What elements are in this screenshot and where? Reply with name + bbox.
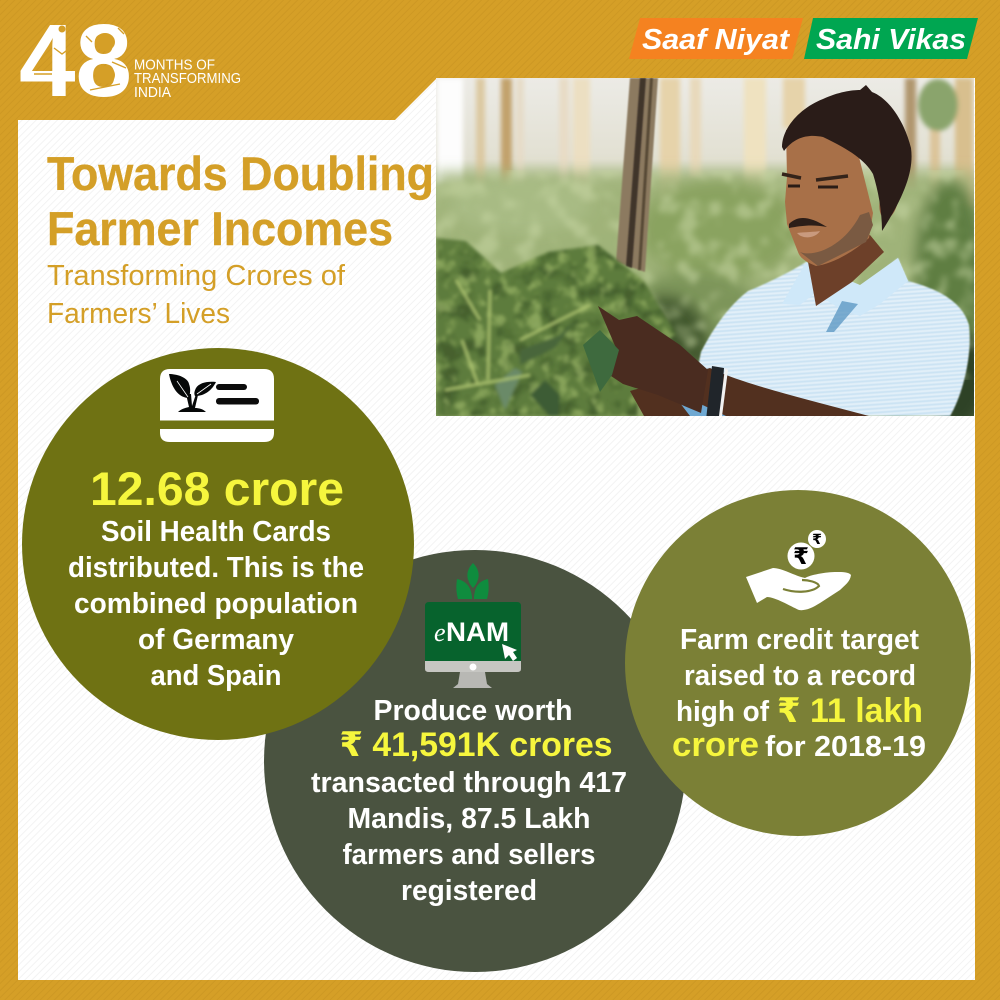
hair [782,85,912,231]
icon: numeral 48 made of pictograms: 48 [19,3,132,118]
text: eNAM statistic: Mandis, 87.5 Lakh [348,803,590,835]
text: farm credit statistic: Farm credit target [680,624,919,656]
text: farm credit statistic [672,624,926,764]
text: farm credit statistic: raised to a record [684,660,916,692]
logo text: MONTHS OF [134,58,215,74]
forearm [630,368,869,416]
badge: Saaf Niyat: Saaf Niyat [642,24,790,56]
logo text: TRANSFORMING [134,71,241,87]
icon: soil health card [160,369,274,442]
ear [879,202,897,216]
subtitle: Farmers’ Lives [47,298,230,330]
text: eNAM statistic: farmers and sellers [342,839,596,871]
shirt cuff [681,404,726,416]
foreground plant [436,236,676,416]
panel: Soil Health Cards circle [22,348,414,740]
blurred bamboo stakes [436,78,974,206]
text: soil health statistic: Soil Health Cards [101,516,331,548]
heading [47,147,434,330]
icon: hand with rupee coins: ₹ [793,543,809,569]
wooden stake [616,78,658,272]
icon: eNAM monitor: e [434,618,446,647]
icon: hand with rupee coins: ₹ [812,531,822,547]
panel: eNAM circle [264,550,686,972]
text: farm credit statistic: crore [672,726,759,764]
text: farm credit statistic: for 2018-19 [765,731,926,763]
text: farm credit statistic: ₹ 11 lakh [777,692,923,730]
blurred background foliage [436,172,990,430]
neck [808,235,884,306]
text: eNAM statistic: ₹ 41,591K crores [340,726,612,764]
icon: hand with rupee coins [746,530,851,610]
panel: farm credit circle [625,490,971,836]
title [47,147,434,255]
photo: farmer tending tomato plants [436,78,990,430]
badge: Sahi Vikas: Sahi Vikas [816,24,966,56]
text: eNAM statistic: Produce worth [374,695,572,727]
text: eNAM statistic: transacted through 417 [311,767,627,799]
text: soil health statistic: of Germany [138,624,294,656]
eyes and brows [782,174,848,180]
hand [598,306,708,413]
bracelet [706,366,724,416]
logo: 48 months of transforming India [19,3,241,118]
text: farm credit statistic: high of [676,696,769,728]
subtitle [47,260,346,330]
farmer [583,85,970,424]
badge: Sahi Vikas [804,18,978,59]
icon: eNAM monitor [425,563,521,688]
logo text [134,58,241,101]
moustache [789,218,827,228]
text: eNAM statistic: registered [401,875,537,907]
text: soil health statistic: combined population [74,588,358,620]
soft leaf texture in background [436,170,974,380]
badge: Saaf Niyat [629,18,803,59]
text: soil health statistic: 12.68 crore [90,462,344,515]
subtitle: Transforming Crores of [47,260,346,292]
text: soil health statistic: distributed. This is the [68,552,364,584]
leaf over hand [583,330,619,392]
title: Farmer Incomes [47,202,393,255]
icon: eNAM monitor: NAM [446,617,509,647]
face [785,125,873,266]
shirt [692,258,970,416]
logo text: INDIA [134,85,171,101]
shirt collar [782,258,908,316]
title: Towards Doubling [47,147,434,200]
text: soil health statistic: and Spain [150,660,282,692]
text: eNAM statistic [311,695,627,907]
text: soil health statistic [68,462,364,692]
